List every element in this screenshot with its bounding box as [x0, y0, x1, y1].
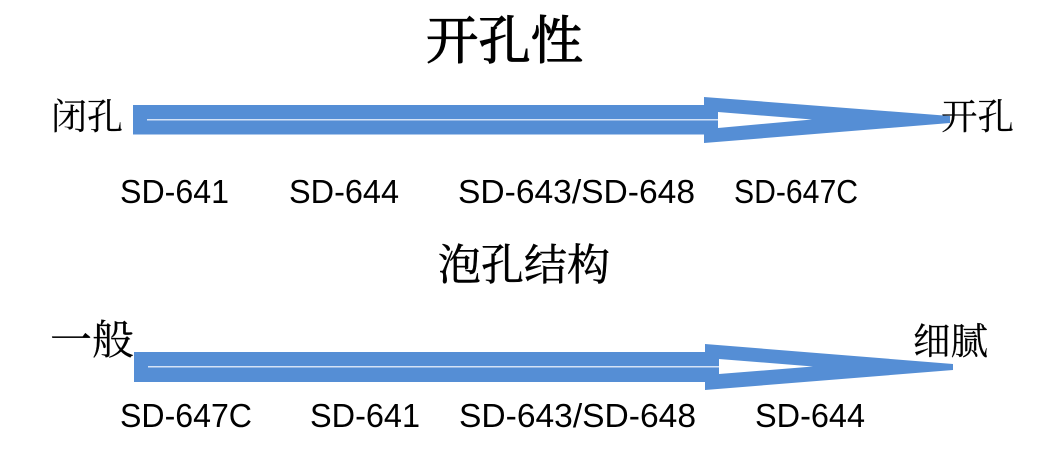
product ranking: open-cell — [120, 173, 858, 210]
arrow: cell structure scale — [134, 344, 953, 390]
product ranking: open-cell: SD-641 — [120, 173, 229, 210]
label: 细腻: 细腻 — [913, 322, 988, 363]
product ranking: open-cell: SD-643/SD-648 — [458, 173, 695, 210]
label: 一般: 一般 — [50, 317, 134, 363]
label: 开孔: 开孔 — [941, 97, 1014, 137]
product ranking: cell structure — [120, 397, 865, 434]
product ranking: cell structure: SD-647C — [120, 397, 252, 434]
product ranking: cell structure: SD-644 — [755, 397, 865, 434]
arrow: open-cell scale — [133, 97, 950, 143]
label: 闭孔: 闭孔 — [51, 97, 123, 137]
product ranking: open-cell: SD-647C — [734, 173, 858, 210]
product ranking: cell structure: SD-643/SD-648 — [459, 397, 696, 434]
product ranking: cell structure: SD-641 — [310, 397, 420, 434]
product ranking: open-cell: SD-644 — [289, 173, 399, 210]
heading: 泡孔结构: 泡孔结构 — [438, 243, 610, 290]
title: 开孔性: 开孔性 — [426, 14, 583, 71]
